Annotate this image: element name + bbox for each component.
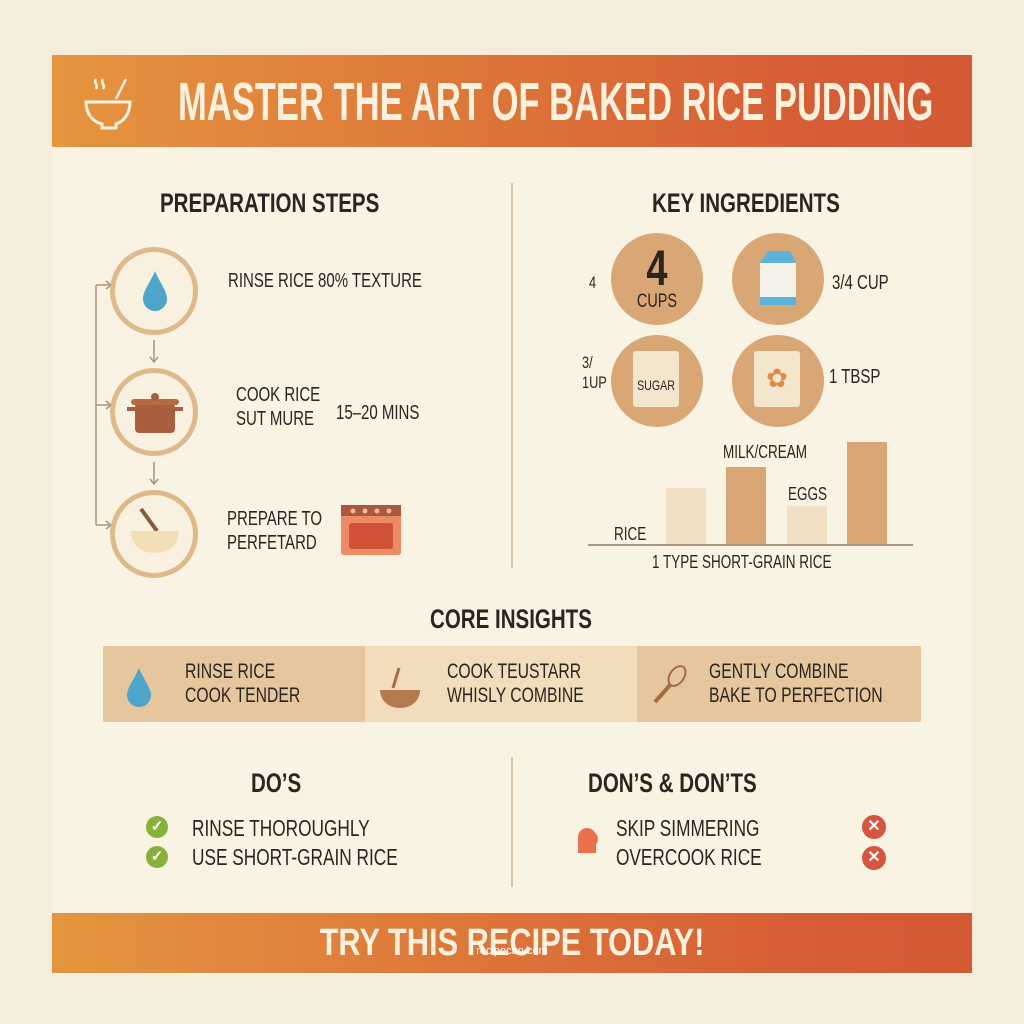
- panel: don'ts: SKIP SIMMERING: [616, 815, 759, 841]
- divider lower: [511, 757, 513, 887]
- insight 2: COOK TEUSTARR: [447, 660, 581, 683]
- panel: don'ts: ✕: [867, 818, 881, 835]
- heading: core insights: CORE INSIGHTS: [430, 604, 592, 634]
- icon: mitt: [578, 828, 598, 853]
- ingredient: milk 4 cups: [611, 233, 703, 325]
- ingredient: vanilla: [732, 335, 824, 427]
- panel: do's: USE SHORT-GRAIN RICE: [192, 844, 398, 870]
- footer banner: recipecan.com: [476, 945, 548, 957]
- insight 1: RINSE RICE: [185, 660, 275, 683]
- panel: do's: DO’S: [251, 768, 301, 798]
- insight 1: [103, 646, 365, 722]
- step 3: [110, 490, 198, 578]
- panel: preparation steps: RINSE RICE 80% TEXTURE: [228, 270, 422, 292]
- check items: ✓: [151, 818, 163, 835]
- heading: KEY INGREDIENTS: [652, 188, 840, 218]
- bar chart: [588, 442, 913, 572]
- icon: oven: [341, 505, 401, 555]
- insight 3: BAKE TO PERFECTION: [709, 684, 883, 707]
- panel: do's: RINSE THOROUGHLY: [192, 815, 370, 841]
- bar chart: EGGS: [788, 484, 827, 504]
- panel: do's: [146, 768, 398, 870]
- panel: don'ts: DON’S & DON’TS: [588, 768, 757, 798]
- ingredient: sugar: SUGAR: [637, 377, 675, 393]
- ingredient: sugar: [611, 335, 703, 427]
- bar chart: RICE: [614, 524, 646, 544]
- flow arrows: [95, 280, 158, 530]
- ingredient: vanilla: ✿: [766, 363, 788, 393]
- panel: preparation steps: PERFETARD: [227, 532, 317, 554]
- insight 3: [637, 646, 921, 722]
- ingredient: cream carton: [732, 233, 824, 325]
- insight 2: [365, 646, 637, 722]
- insight 2: WHISLY COMBINE: [447, 684, 584, 707]
- insight 3: GENTLY COMBINE: [709, 660, 848, 683]
- footer banner: TRY THIS RECIPE TODAY!: [320, 922, 704, 964]
- panel: key ingredients: 4: [589, 273, 596, 292]
- panel: preparation steps: PREPARE TO: [227, 508, 322, 530]
- ingredient: milk 4 cups: CUPS: [637, 291, 677, 312]
- check items: [146, 816, 168, 838]
- panel: preparation steps: SUT MURE: [236, 408, 314, 430]
- bar chart: 1 TYPE SHORT-GRAIN RICE: [652, 552, 832, 572]
- insight 1: COOK TENDER: [185, 684, 300, 707]
- panel: key ingredients: 1 TBSP: [829, 366, 880, 388]
- step 1: [110, 247, 198, 335]
- ingredient: milk 4 cups: 4: [646, 240, 668, 296]
- panel: do's: ✓: [151, 848, 163, 865]
- panel: don'ts: ✕: [867, 849, 881, 866]
- panel: preparation steps: COOK RICE: [236, 384, 320, 406]
- panel: core insights: [103, 646, 921, 722]
- footer banner: [52, 913, 972, 973]
- title: MASTER THE ART OF BAKED RICE PUDDING: [178, 72, 933, 132]
- panel: key ingredients: [582, 188, 913, 572]
- step 2: [110, 368, 198, 456]
- divider: [511, 183, 513, 568]
- panel: key ingredients: 3/4 CUP: [832, 272, 889, 294]
- bar chart: MILK/CREAM: [723, 442, 807, 462]
- panel: key ingredients: 3/: [582, 353, 593, 372]
- panel: preparation steps: [95, 188, 422, 578]
- icon: bowl: [84, 78, 132, 130]
- panel: key ingredients: 1UP: [582, 373, 607, 392]
- panel: don'ts: [578, 768, 886, 870]
- heading: PREPARATION STEPS: [160, 188, 379, 218]
- header banner: [52, 55, 972, 147]
- panel: don'ts: OVERCOOK RICE: [616, 844, 762, 870]
- panel: preparation steps: 15–20 MINS: [336, 402, 419, 424]
